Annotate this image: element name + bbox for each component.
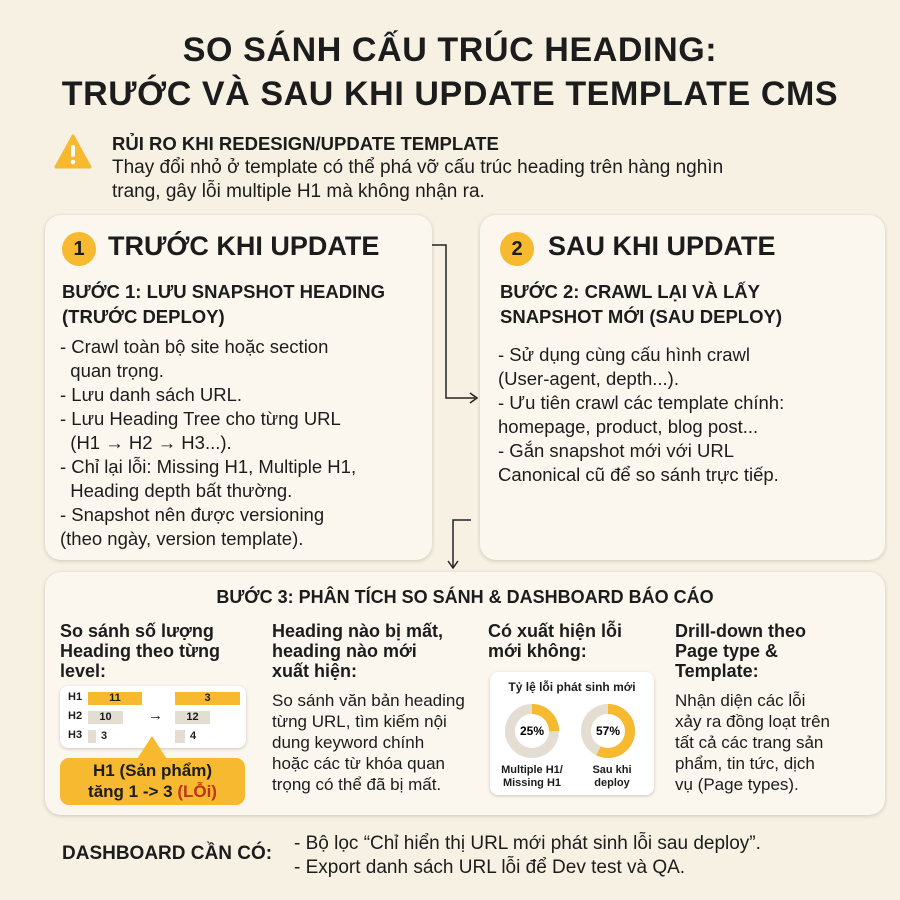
step 3 heading: BƯỚC 3: PHÂN TÍCH SO SÁNH & DASHBOARD BÁO CÁO xyxy=(216,587,714,607)
callout: H1 increase xyxy=(60,758,245,805)
chart: heading count comparison: 12 xyxy=(186,711,199,723)
step 1 bullets: - Chỉ lại lỗi: Missing H1, Multiple H1, xyxy=(60,456,356,477)
column 4 text xyxy=(675,691,830,794)
column 1 heading: So sánh số lượng xyxy=(60,621,214,641)
dashboard requirements xyxy=(62,832,761,878)
chart: heading count comparison: H2 xyxy=(68,710,82,722)
dashboard bullets: - Export danh sách URL lỗi để Dev test và QA. xyxy=(294,857,685,878)
column 2 text: trọng có thể đã bị mất. xyxy=(272,775,441,794)
column 2 heading: heading nào mới xyxy=(272,641,417,661)
step 1 bullets: (H1 → H2 → H3...). xyxy=(70,432,232,453)
warning text xyxy=(112,157,723,202)
step 1 bullets: Heading depth bất thường. xyxy=(70,480,292,501)
title xyxy=(62,30,838,113)
column 3 heading xyxy=(488,620,622,661)
dashboard bullets xyxy=(294,832,761,878)
step 2 bullets: Canonical cũ để so sánh trực tiếp. xyxy=(498,464,779,485)
chart: heading count comparison xyxy=(60,686,246,748)
column 2 heading: xuất hiện: xyxy=(272,661,357,681)
panel: before update xyxy=(45,215,432,560)
step 2 bullets: homepage, product, blog post... xyxy=(498,416,758,437)
chart: heading count comparison: 3 xyxy=(101,730,107,742)
chart: heading count comparison: 10 xyxy=(99,711,112,723)
column 4 heading: Drill-down theo xyxy=(675,621,806,641)
callout: H1 increase: H1 (Sản phẩm) xyxy=(93,761,212,780)
badge 2: 2 xyxy=(511,238,523,260)
chart: heading count comparison: H1 xyxy=(68,691,82,703)
dashboard label: DASHBOARD CẦN CÓ: xyxy=(62,843,272,864)
step 2 heading xyxy=(500,281,782,327)
step 1 bullets: (theo ngày, version template). xyxy=(60,528,303,549)
column 2 text: từng URL, tìm kiếm nội xyxy=(272,712,447,731)
column 4 heading: Template: xyxy=(675,661,759,681)
step 2 bullets: (User-agent, depth...). xyxy=(498,368,679,389)
chart: heading count comparison: 4 xyxy=(190,730,196,742)
dashboard bullets: - Bộ lọc “Chỉ hiển thị URL mới phát sinh lỗi sau deploy”. xyxy=(294,833,761,854)
step 2 bullets: - Gắn snapshot mới với URL xyxy=(498,440,734,461)
column 1 heading: Heading theo từng xyxy=(60,641,220,661)
column 1 heading xyxy=(60,621,220,681)
step 1 heading: (TRƯỚC DEPLOY) xyxy=(62,306,225,327)
step 1 bullets: - Crawl toàn bộ site hoặc section xyxy=(60,336,328,357)
column 3 heading: mới không: xyxy=(488,641,587,661)
step 2 heading: SNAPSHOT MỚI (SAU DEPLOY) xyxy=(500,306,782,327)
badge 1 xyxy=(62,232,96,266)
step 2 bullets: - Ưu tiên crawl các template chính: xyxy=(498,392,784,413)
step 1 bullets: - Snapshot nên được versioning xyxy=(60,504,324,525)
chart: heading count comparison: 3 xyxy=(204,692,211,704)
step 1 heading xyxy=(62,281,385,327)
column 1 heading: level: xyxy=(60,661,106,681)
badge 1: 1 xyxy=(73,238,85,260)
panel: step 3 analysis xyxy=(45,572,885,815)
chart: heading count comparison: 11 xyxy=(109,692,121,704)
icon: warning xyxy=(54,134,92,168)
title: TRƯỚC VÀ SAU KHI UPDATE TEMPLATE CMS xyxy=(62,75,838,113)
column 2 text: So sánh văn bản heading xyxy=(272,691,465,710)
column 2 heading: Heading nào bị mất, xyxy=(272,621,443,641)
warning heading: RỦI RO KHI REDESIGN/UPDATE TEMPLATE xyxy=(112,133,499,154)
callout: H1 increase: tăng 1 -> 3 (LỖi) xyxy=(88,782,217,801)
column 4 text: Nhận diện các lỗi xyxy=(675,691,805,710)
step 1 bullets xyxy=(60,336,356,549)
column 4 heading xyxy=(675,621,806,681)
chart: donut error rates: Tỷ lệ lỗi phát sinh mới xyxy=(508,680,636,694)
chart: donut error rates xyxy=(490,672,654,795)
column 4 text: vụ (Page types). xyxy=(675,775,799,794)
panel heading: SAU KHI UPDATE xyxy=(548,231,776,261)
step 2 bullets xyxy=(498,344,784,485)
column 4 heading: Page type & xyxy=(675,641,778,661)
title: SO SÁNH CẤU TRÚC HEADING: xyxy=(183,31,717,69)
warning block xyxy=(54,133,723,202)
chart: donut error rates: Sau khi xyxy=(592,764,632,776)
column 3 heading: Có xuất hiện lỗi xyxy=(488,621,622,641)
column 2 text xyxy=(272,691,465,794)
arrow: panel 2 to panel 3 xyxy=(447,519,471,570)
warning text: trang, gây lỗi multiple H1 mà không nhận ra. xyxy=(112,181,485,202)
panel heading: TRƯỚC KHI UPDATE xyxy=(108,231,379,261)
chart: donut error rates: Multiple H1/ xyxy=(501,764,563,776)
step 1 bullets: quan trọng. xyxy=(70,360,164,381)
step 1 heading: BƯỚC 1: LƯU SNAPSHOT HEADING xyxy=(62,281,385,302)
chart: donut error rates: 57% xyxy=(596,724,620,738)
column 4 text: xảy ra đồng loạt trên xyxy=(675,712,830,731)
column 2 heading xyxy=(272,621,443,681)
column 4 text: phẩm, tin tức, dịch xyxy=(675,754,815,773)
column 2 text: dung keyword chính xyxy=(272,733,424,752)
step 1 bullets: - Lưu danh sách URL. xyxy=(60,384,242,405)
warning text: Thay đổi nhỏ ở template có thể phá vỡ cấu trúc heading trên hàng nghìn xyxy=(112,157,723,178)
chart: donut error rates: Missing H1 xyxy=(503,777,561,789)
chart: heading count comparison: → xyxy=(148,707,163,724)
column 2 text: hoặc các từ khóa quan xyxy=(272,754,445,773)
chart: donut error rates: 25% xyxy=(520,724,544,738)
chart: donut error rates: deploy xyxy=(594,777,630,789)
step 2 heading: BƯỚC 2: CRAWL LẠI VÀ LẤY xyxy=(500,281,760,302)
badge 2 xyxy=(500,232,534,266)
arrow: panel 1 to panel 2 xyxy=(432,244,478,404)
step 2 bullets: - Sử dụng cùng cấu hình crawl xyxy=(498,344,750,365)
chart: heading count comparison: H3 xyxy=(68,729,82,741)
step 1 bullets: - Lưu Heading Tree cho từng URL xyxy=(60,408,341,429)
panel: after update xyxy=(480,215,885,560)
column 4 text: tất cả các trang sản xyxy=(675,733,823,752)
